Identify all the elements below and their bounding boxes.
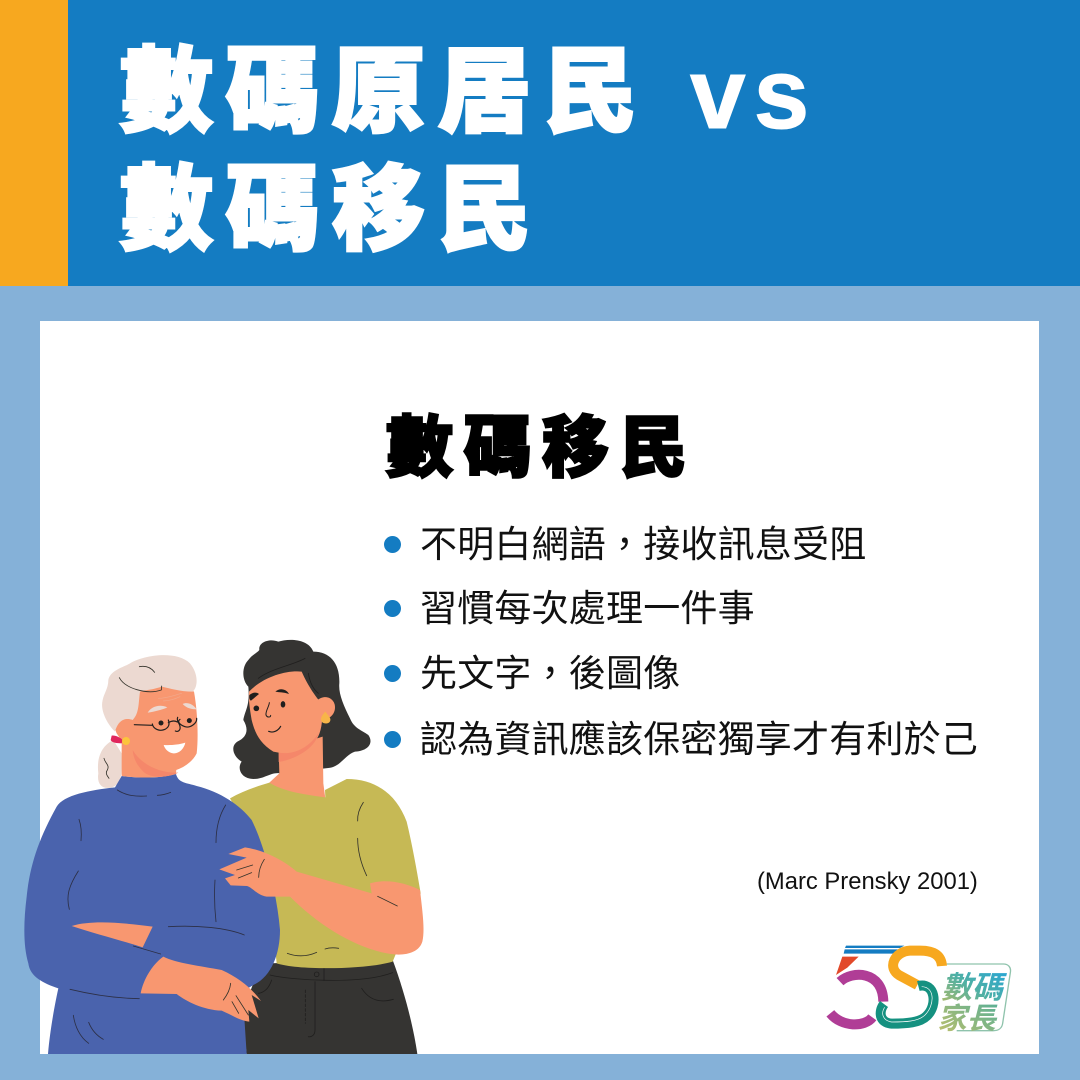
bullet text 3: 先文字，後圖像 xyxy=(420,643,680,697)
title line 1: 數碼原居民 xyxy=(120,16,650,151)
header band xyxy=(0,0,1080,286)
hand lines xyxy=(223,983,248,1015)
section heading: 數碼移民 xyxy=(386,394,698,491)
bullet dot 1 xyxy=(384,536,401,553)
arm xyxy=(219,847,424,955)
shirt folds xyxy=(287,802,367,956)
hair tie xyxy=(111,736,123,743)
earring xyxy=(321,712,330,723)
blue stripes xyxy=(844,946,904,954)
wrist line xyxy=(133,946,161,954)
white content panel xyxy=(40,321,1039,1054)
orange accent block xyxy=(0,0,68,286)
old woman hand xyxy=(141,957,261,1022)
hair xyxy=(233,640,371,779)
younger woman arm and hand xyxy=(219,847,424,955)
purple 5 xyxy=(830,975,883,1024)
face xyxy=(115,686,198,773)
bullet dot 3 xyxy=(384,665,401,682)
jaw shadow xyxy=(133,750,178,777)
shirt xyxy=(230,779,421,968)
frame xyxy=(947,964,1011,1031)
neck shadow xyxy=(279,733,318,762)
bullet text 4: 認為資訊應該保密獨享才有利於己 xyxy=(420,709,978,763)
logo: 55 digital parents xyxy=(826,946,1012,1038)
face details xyxy=(249,658,318,732)
bullet text 1: 不明白網語，接收訊息受阻 xyxy=(420,514,866,568)
pants details xyxy=(258,968,393,1037)
green inner line xyxy=(883,987,932,1022)
pony lines xyxy=(104,758,109,778)
header band: vs xyxy=(690,38,817,150)
earring xyxy=(122,737,130,745)
green S xyxy=(881,985,934,1024)
orange S xyxy=(893,951,942,985)
neck xyxy=(122,740,177,778)
neck xyxy=(269,737,326,803)
ponytail xyxy=(98,740,122,788)
bullet dot 2 xyxy=(384,600,401,617)
eyebrows xyxy=(148,703,197,713)
bullet dot 4 xyxy=(384,731,401,748)
hand lines xyxy=(237,859,397,906)
glasses xyxy=(134,717,197,731)
logo text line 1: 數碼 xyxy=(941,962,1007,1007)
ear xyxy=(317,697,335,719)
citation: (Marc Prensky 2001) xyxy=(757,868,978,895)
older woman xyxy=(24,655,280,1054)
pants xyxy=(242,960,417,1054)
face xyxy=(249,671,322,753)
smile xyxy=(164,743,185,753)
red stroke of 5 xyxy=(836,957,859,975)
sweater folds xyxy=(68,790,244,1043)
illustration: two women xyxy=(24,640,424,1054)
logo text line 2: 家長 xyxy=(937,996,998,1038)
bullet text 2: 習慣每次處理一件事 xyxy=(420,578,755,632)
crossed arm skin xyxy=(72,922,153,947)
sweater xyxy=(24,774,280,1054)
younger woman xyxy=(230,640,421,1054)
title line 2: 數碼移民 xyxy=(120,134,544,269)
hair xyxy=(102,655,197,732)
forehead lines xyxy=(158,693,182,701)
hair lines xyxy=(119,666,162,692)
